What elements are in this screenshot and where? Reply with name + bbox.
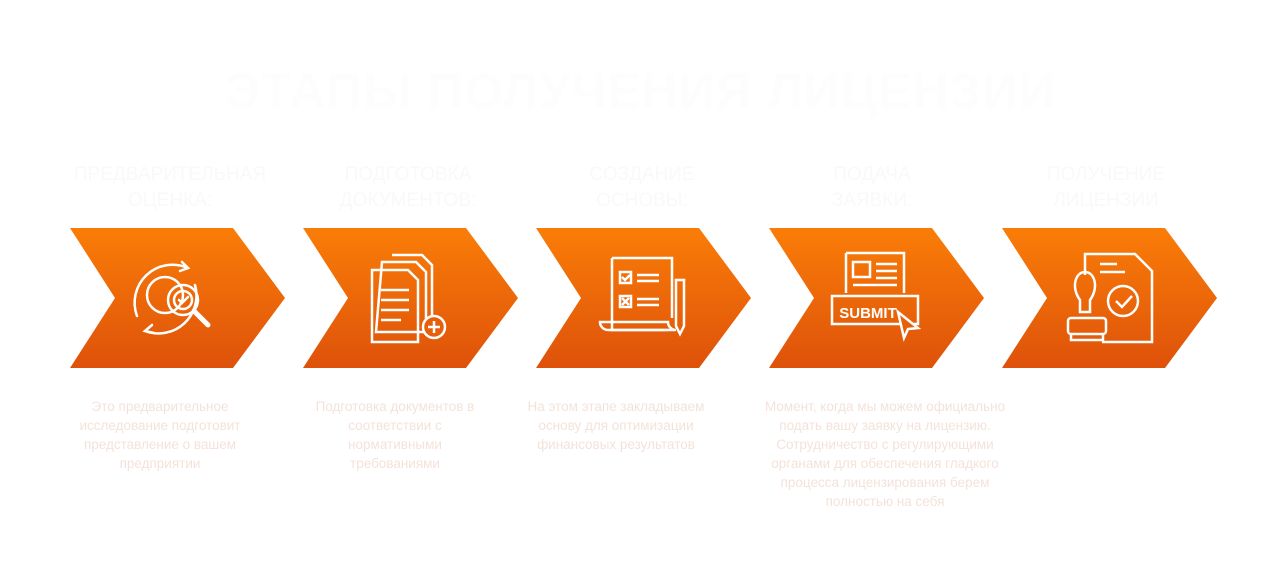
heading: step 2	[293, 162, 523, 214]
description 1: Это предварительное	[92, 399, 228, 414]
heading: step 2: ПОДГОТОВКА	[345, 164, 471, 185]
chevron 2	[303, 228, 518, 368]
description 4: полностью на себя	[826, 494, 944, 509]
description 4: органами для обеспечения гладкого	[771, 456, 999, 471]
chevron 3	[536, 228, 751, 368]
description 4: Сотрудничество с регулирующими	[776, 437, 994, 452]
chevron 1	[70, 228, 285, 368]
description 2: требованиями	[350, 456, 440, 471]
icon text: SUBMIT: SUBMIT	[839, 305, 897, 322]
description 3: финансовых результатов	[537, 437, 695, 452]
description 4	[765, 399, 1005, 509]
icon: documents plus	[372, 255, 445, 342]
chevron 4	[769, 228, 984, 368]
heading: step 1	[55, 162, 285, 214]
icon: stamp document	[1068, 254, 1152, 342]
icon: checklist scroll	[600, 258, 684, 334]
heading: step 1: ОЦЕНКА:	[128, 190, 212, 211]
heading: step 4: ПОДАЧА	[833, 164, 911, 185]
heading: step 3: ОСНОВЫ:	[596, 190, 688, 211]
heading: step 5: ЛИЦЕНЗИИ	[1053, 190, 1159, 211]
heading: step 1: ПРЕДВАРИТЕЛЬНАЯ	[74, 164, 266, 185]
description 1	[80, 399, 240, 471]
heading: step 3: СОЗДАНИЕ	[589, 164, 695, 185]
description 2: соответствии с	[348, 418, 442, 433]
description 3: На этом этапе закладываем	[528, 399, 704, 414]
heading: step 3	[527, 162, 757, 214]
description 4: Момент, когда мы можем официально	[765, 399, 1005, 414]
heading: step 2: ДОКУМЕНТОВ:	[340, 190, 476, 211]
description 1: исследование подготовит	[80, 418, 240, 433]
description 3	[528, 399, 704, 452]
description 2: Подготовка документов в	[316, 399, 474, 414]
description 1: предприятии	[120, 456, 200, 471]
heading: step 4: ЗАЯВКИ:	[832, 190, 912, 211]
heading: step 5	[991, 162, 1221, 214]
chevron 5	[1002, 228, 1217, 368]
icon: submit	[832, 253, 918, 338]
description 4: подать вашу заявку на лицензию.	[779, 418, 991, 433]
description 2	[316, 399, 474, 471]
heading: step 5: ПОЛУЧЕНИЕ	[1047, 164, 1165, 185]
description 3: основу для оптимизации	[538, 418, 694, 433]
icon: gear magnifier	[135, 262, 208, 333]
description 4: процесса лицензирования берем	[781, 475, 989, 490]
heading: step 4	[757, 162, 987, 214]
description 2: нормативными	[348, 437, 442, 452]
description 1: представление о вашем	[84, 437, 236, 452]
title: ЭТАПЫ ПОЛУЧЕНИЯ ЛИЦЕНЗИИ	[224, 63, 1056, 119]
